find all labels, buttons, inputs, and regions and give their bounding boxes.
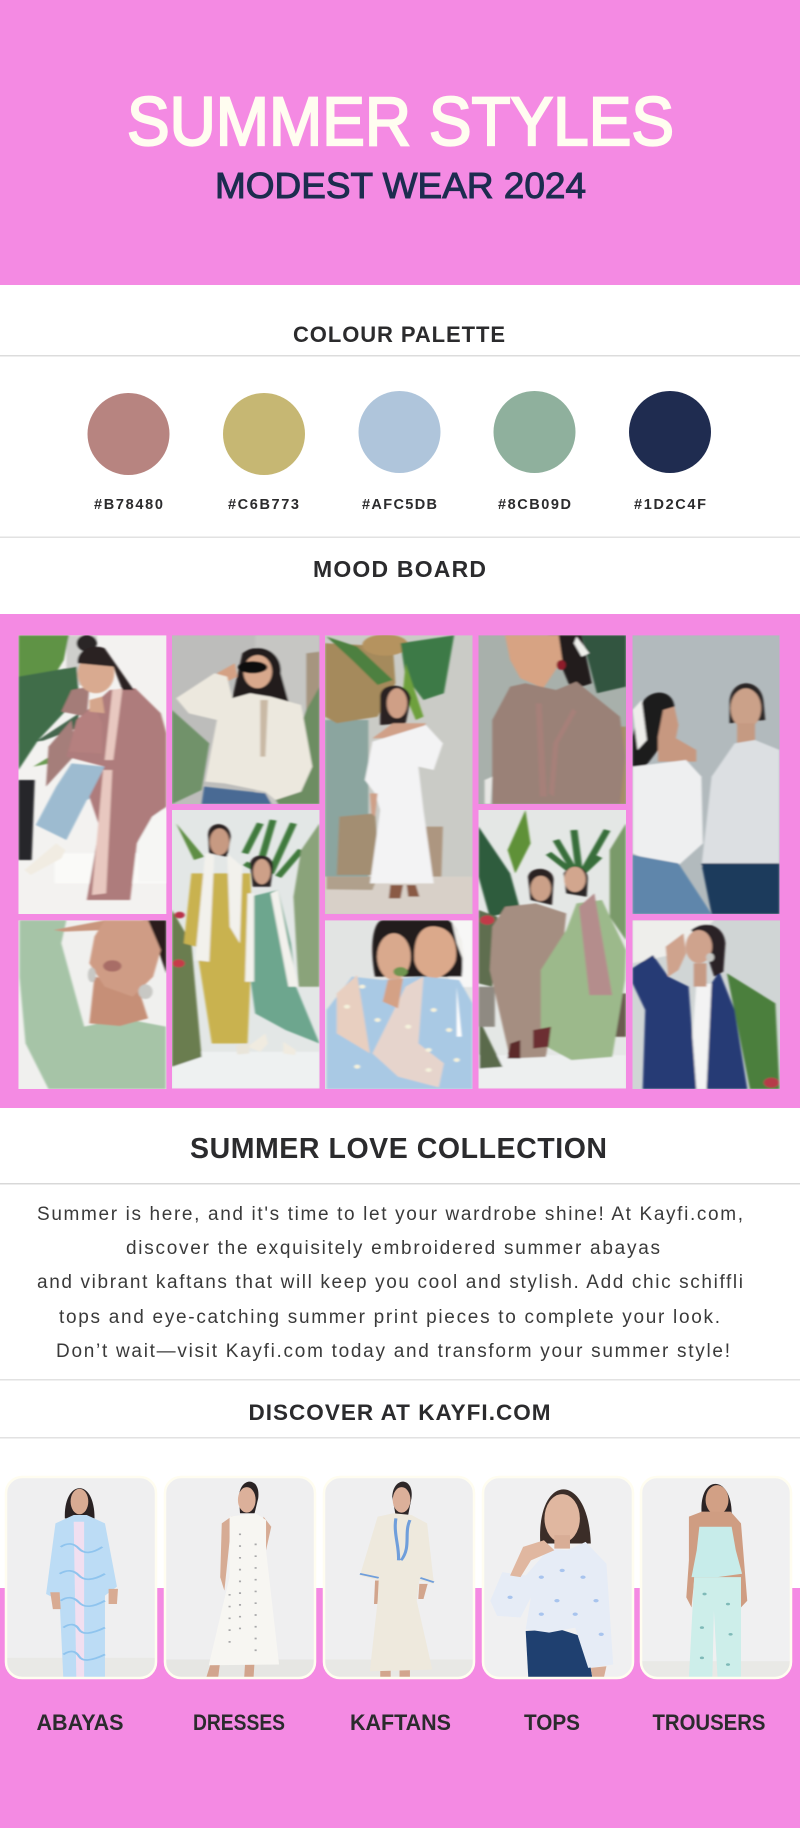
mood board panel [0,614,800,1108]
body paragraph: Don’t wait—visit Kayfi.com today and transform your summer style! [56,1341,730,1362]
swatch: #8CB09D [494,391,576,513]
title: SUMMER STYLES [127,83,674,160]
header banner [0,0,800,285]
photo: white blouse with sunglasses [172,635,320,804]
category label: tops: TOPS [524,1710,580,1735]
body paragraph [37,1204,743,1362]
body paragraph: Summer is here, and it's time to let your wardrobe shine! At Kayfi.com, [37,1204,743,1225]
mood board heading: MOOD BOARD [313,556,486,582]
product card: abayas [6,1477,156,1678]
photo: sage top portrait [18,920,166,1089]
colour palette panel [0,322,800,513]
photo: navy coat [632,920,780,1089]
photo: daisy tulle dresses [325,920,472,1089]
summer love collection heading: SUMMER LOVE COLLECTION [190,1133,607,1165]
swatch: #1D2C4F [629,391,711,513]
swatch: #B78480 [88,393,170,513]
swatch: #1D2C4F: #1D2C4F [634,497,706,513]
category label: trousers: TROUSERS [652,1710,766,1735]
category label: dresses: DRESSES [193,1710,285,1735]
photo: rose abaya [18,635,166,914]
swatch: #AFC5DB: #AFC5DB [362,497,437,513]
product card: kaftans [324,1477,474,1678]
swatch: #AFC5DB [358,391,440,513]
category label: abayas: ABAYAS [36,1710,124,1735]
swatch: #B78480: #B78480 [94,497,163,513]
swatch: #8CB09D: #8CB09D [498,497,571,513]
swatch: #C6B773 [223,393,305,513]
photo: white off-shoulder dress [325,635,472,914]
colour palette heading: COLOUR PALETTE [293,322,505,347]
pink footer band [0,1588,800,1828]
swatch: #C6B773: #C6B773 [228,497,299,513]
product card: tops [483,1477,633,1678]
photo: taupe and sage abayas [478,810,626,1088]
discover at kayfi heading: DISCOVER AT KAYFI.COM [248,1400,550,1425]
product card: dresses [165,1477,315,1678]
photo: two women in white blouses [632,635,780,914]
photo: embroidered mauve top [478,635,626,804]
subtitle: MODEST WEAR 2024 [215,165,586,206]
body paragraph: and vibrant kaftans that will keep you cool and stylish. Add chic schiffli [37,1272,743,1293]
body paragraph: tops and eye-catching summer print pieces to complete your look. [59,1307,720,1328]
photo: yellow and green abayas [172,810,320,1088]
product card: trousers [641,1477,791,1678]
body paragraph: discover the exquisitely embroidered summer abayas [126,1238,660,1259]
category label: kaftans: KAFTANS [350,1710,451,1735]
